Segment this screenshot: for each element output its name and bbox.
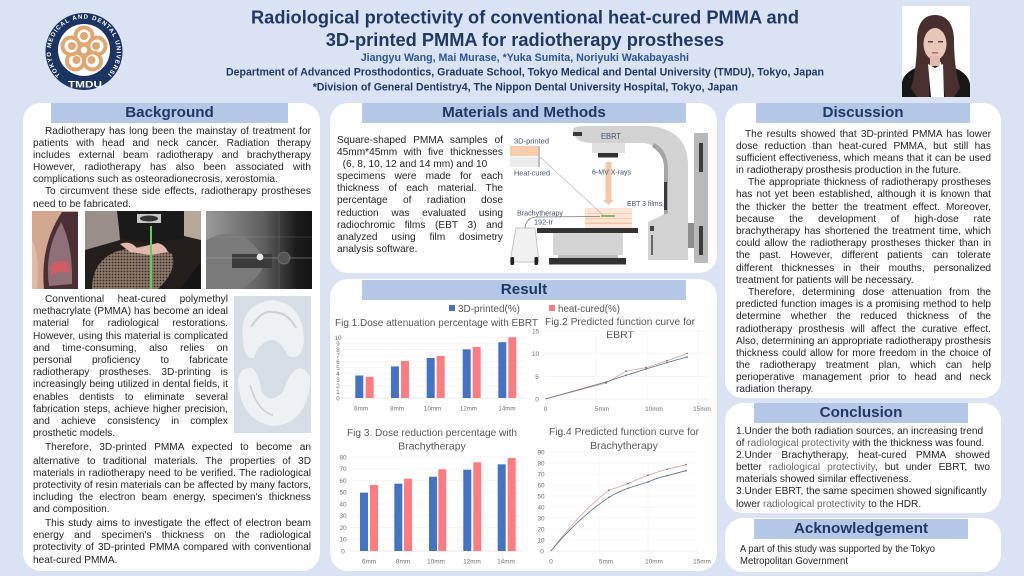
heading: acknowledgement: [754, 519, 968, 539]
chart: Fig 2 predicted function curve for EBRT: 5: [535, 374, 539, 381]
diagram labels: 3D-printed: [514, 138, 549, 146]
chart: Fig 4 predicted function curve for brachytherapy: 15mm: [693, 558, 711, 566]
panel: acknowledgement: [725, 518, 1001, 572]
text block: discussion: predicted function images is a promising method to help: [736, 299, 991, 310]
text block: acknowledgement: [740, 544, 935, 567]
text block: conclusion: of radiological protectivity with the thickness was found.: [736, 438, 984, 449]
chart: Fig 4 predicted function curve for brachytherapy: 60: [537, 482, 545, 490]
chart: Fig 3 dose reduction with brachytherapy: 14mm: [497, 558, 515, 566]
chart: Fig 2 predicted function curve for EBRT: 10mm: [645, 406, 663, 413]
chart: Fig 1 dose attenuation with EBRT: Fig 1.Dose attenuation percentage with EBRT: [335, 317, 539, 329]
text block: conventional PMMA: and achieve consistency in complex: [33, 416, 228, 427]
text block: methods: 45mm*45mm with five thicknesses: [337, 147, 503, 158]
affiliations: Department of Advanced Prosthodontics, Graduate School, Tokyo Medical and Dental University (TMDU), Tokyo, Japan: [226, 67, 824, 79]
diagram labels: 192-Ir: [534, 220, 554, 226]
text block: background intro: However, radiotherapy has also been associated with: [33, 162, 311, 173]
chart: Fig 2 predicted function curve for EBRT: 10: [532, 351, 539, 358]
text block: background intro: complications such as osteoradionecrosis, xerostomia.: [33, 174, 278, 185]
panel: background: [23, 103, 320, 571]
text block: conventional PMMA: personal proficiency to fabricate: [33, 355, 228, 366]
text block: methods: (6, 8, 10, 12 and 14 mm) and 10: [343, 159, 487, 170]
text block: 3D-printed PMMA: [33, 442, 311, 515]
chart: Fig 2 predicted function curve for EBRT: Fig.2 Predicted function curve for: [545, 316, 695, 328]
chart: Fig 3 dose reduction with brachytherapy: 6mm: [362, 558, 376, 566]
chart: Fig 4 predicted function curve for brachytherapy: 0: [540, 548, 544, 556]
chart: Fig 4 predicted function curve for brachytherapy: 40: [537, 504, 545, 512]
photo: patient under linear accelerator: [85, 211, 201, 289]
heading: conclusion: Conclusion: [820, 404, 902, 421]
diagram: radiotherapy setup: [510, 126, 708, 265]
text block: acknowledgement: Metropolitan Government: [740, 556, 848, 567]
heading: background: [51, 103, 288, 123]
heading: result: Result: [501, 281, 547, 298]
logo: TMDU: [46, 13, 122, 90]
text block: 3D-printed PMMA: Therefore, 3D-printed PMMA expected to become an: [45, 442, 311, 453]
chart: Fig 4 predicted function curve for brachytherapy: 50: [537, 494, 545, 500]
text block: discussion: the thicker the better the treatment effect. Moreover,: [736, 202, 991, 213]
X-ray beam arrow: [603, 162, 614, 205]
chart: Fig 1 dose attenuation with EBRT: 6: [336, 359, 340, 366]
chart: Fig 3 dose reduction with brachytherapy: 40: [339, 502, 347, 508]
text block: discussion: has not yet been established, although it is known that: [736, 189, 991, 200]
text block: study aim: protectivity of 3D-printed PMMA compared with conventional: [33, 542, 311, 553]
heading: background: Background: [125, 104, 214, 121]
chart: Fig 2 predicted function curve for EBRT: 15: [532, 328, 539, 336]
heading: result: [362, 280, 686, 300]
text block: conventional PMMA: and time-consuming, also relies on: [33, 343, 228, 354]
chart: Fig 3 dose reduction with brachytherapy: 70: [339, 466, 347, 473]
chart: Fig 1 dose attenuation with EBRT: 8mm: [390, 406, 404, 412]
chart: Fig 3 dose reduction with brachytherapy: 80: [339, 454, 347, 462]
text block: study aim: This study aims to investigate the effect of electron beam: [45, 518, 311, 529]
text block: discussion: [736, 128, 991, 395]
affiliations: [226, 67, 824, 94]
text block: background intro: To circumvent these side effects, radiotherapy prostheses: [45, 186, 311, 197]
text block: discussion: sufficient effectiveness, which means that it can be used: [736, 153, 991, 164]
text block: conventional PMMA: fabrication steps, achieve higher precision,: [33, 404, 228, 415]
diagram labels: EBRT: [601, 132, 621, 141]
chart: Fig 1 dose attenuation with EBRT: 2: [336, 383, 340, 390]
diagram labels: 6-MV X-rays: [592, 170, 631, 176]
afterloader: [510, 216, 600, 265]
text block: conventional PMMA: radiotherapy prostheses. 3D-printing is: [33, 367, 228, 378]
photo: oral lesion: [32, 211, 78, 289]
text block: background intro: patients with head and neck cancer. Radiation therapy: [33, 138, 311, 149]
text block: 3D-printed PMMA: alternative to traditional materials. The properties of 3D: [33, 456, 311, 467]
diagram labels: Brachytherapy: [517, 210, 564, 218]
chart: Fig 3 dose reduction with brachytherapy: 12mm: [463, 558, 481, 566]
heading: materials and methods: Materials and Methods: [442, 104, 606, 121]
diagram labels: EBT 3 films: [627, 201, 662, 208]
text block: study aim: heat-cured PMMA.: [33, 555, 117, 566]
legend: [449, 303, 620, 315]
heading: discussion: [756, 103, 970, 123]
chart: Fig 1 dose attenuation with EBRT: 6mm: [354, 406, 368, 412]
couch: [537, 228, 638, 264]
chart: Fig 3 dose reduction with brachytherapy: 50: [339, 490, 347, 496]
text block: methods: radiochromic films (EBT 3) and: [337, 220, 503, 231]
text block: conventional PMMA: Conventional heat-cured polymethyl: [45, 294, 228, 305]
text block: discussion: brachytherapy has shortened the treatment time, which: [736, 226, 991, 237]
text block: methods: reduction was evaluated using: [337, 208, 503, 219]
text block: background intro: includes external beam radiotherapy and brachytherapy: [33, 150, 311, 161]
text block: methods: specimens were made for each: [337, 171, 503, 182]
text block: discussion: perioperative management prior to head and neck: [736, 372, 991, 383]
text block: background intro: [33, 126, 311, 210]
text block: conventional PMMA: [33, 294, 228, 439]
text block: conventional PMMA: However, using this material is complicated: [33, 331, 228, 342]
title: Radiological protectivity of conventional heat-cured PMMA and: [251, 7, 799, 27]
gantry: [573, 126, 708, 263]
chart: Fig 3 dose reduction with brachytherapy: 10: [339, 536, 347, 544]
chart: Fig 4 predicted function curve for brachytherapy: 80: [537, 460, 545, 468]
text block: methods: thickness of each material. The: [337, 183, 503, 194]
text block: background intro: need to be fabricated.: [33, 199, 131, 210]
chart: Fig 4 predicted function curve for brachytherapy: Fig.4 Predicted function curve for: [549, 426, 699, 438]
panel: conclusion: [725, 403, 1001, 513]
chart: Fig 4 predicted function curve for brachytherapy: 90: [537, 450, 545, 456]
text block: conclusion: better radiological protectivity, but under EBRT, two: [736, 462, 990, 473]
chart: Fig 3 dose reduction with brachytherapy: 8mm: [396, 558, 410, 566]
chart: Fig 2 predicted function curve for EBRT: 5mm: [595, 406, 609, 413]
text block: study aim: [33, 518, 311, 566]
text block: discussion: Therefore, determining dose attenuation from the: [748, 287, 991, 298]
chart: Fig 1 dose attenuation with EBRT: 12mm: [460, 406, 477, 412]
text block: discussion: dose reduction than heat-cured PMMA, but still has: [736, 141, 991, 152]
text block: conclusion: 1.Under the both radiation sources, an increasing trend: [736, 426, 983, 436]
chart: Fig 4 predicted function curve for brachytherapy: 30: [537, 516, 545, 522]
chart: Fig 3 dose reduction with brachytherapy: Fig 3. Dose reduction percentage with: [347, 427, 517, 439]
chart: Fig 3 dose reduction with brachytherapy: Brachytherapy: [398, 440, 467, 452]
chart: Fig 4 predicted function curve for brachytherapy: 20: [537, 526, 545, 534]
heading: discussion: Discussion: [822, 104, 904, 121]
text block: methods: Square-shaped PMMA samples of: [337, 134, 503, 146]
text block: discussion: The appropriate thickness of radiotherapy prostheses: [748, 177, 991, 188]
title: 3D-printed PMMA for radiotherapy prostheses: [326, 30, 724, 50]
panel: result: [330, 279, 717, 571]
chart: Fig 4 predicted function curve for brachytherapy: 10mm: [645, 558, 663, 566]
chart: Fig 1 dose attenuation with EBRT: [335, 317, 539, 412]
text block: conventional PMMA: methacrylate (PMMA) has become an ideal: [33, 306, 228, 317]
text block: discussion: Also, determining an appropriate radiotherapy prosthesis: [736, 336, 991, 347]
logo: TMDU: TMDU: [68, 80, 102, 90]
photo: x-ray: [206, 211, 312, 289]
chart: Fig 1 dose attenuation with EBRT: 3: [336, 377, 340, 384]
text block: discussion: radiation therapy.: [736, 384, 813, 395]
text block: discussion: because the development of high-dose rate: [736, 214, 991, 225]
text block: conventional PMMA: prosthetic models.: [33, 428, 115, 439]
chart: Fig 4 predicted function curve for brachytherapy: Brachytherapy: [590, 440, 659, 452]
chart: Fig 3 dose reduction with brachytherapy: 60: [339, 478, 347, 485]
text block: discussion: The results showed that 3D-printed PMMA has lower: [745, 128, 991, 140]
text block: discussion: different thicknesses in their mouths, personalized: [736, 263, 991, 274]
heading: conclusion: [754, 403, 968, 423]
chart: Fig 1 dose attenuation with EBRT: 10mm: [424, 406, 441, 412]
chart: Fig 2 predicted function curve for EBRT: EBRT: [606, 329, 634, 341]
affiliations: *Division of General Dentistry4, The Nippon Dental University Hospital, Tokyo, Japan: [313, 82, 738, 94]
text block: conventional PMMA: material for radiological restorations.: [33, 318, 228, 329]
chart: Fig 1 dose attenuation with EBRT: 10: [335, 335, 342, 342]
text block: discussion: treatment for patients will be necessary.: [736, 275, 914, 286]
chart: Fig 2 predicted function curve for EBRT: 0: [544, 406, 548, 413]
chart: Fig 1 dose attenuation with EBRT: 7: [336, 353, 340, 360]
chart: Fig 1 dose attenuation with EBRT: 8: [336, 347, 340, 354]
title: [251, 7, 799, 50]
text block: methods: analysis software.: [337, 244, 417, 255]
text block: conclusion: 3.Under EBRT, the same specimen showed significantly: [736, 486, 987, 497]
photo: PMMA prostheses: [234, 296, 311, 433]
chart: Fig 3 dose reduction with brachytherapy: 10mm: [427, 558, 445, 566]
chart: Fig 4 predicted function curve for brachytherapy: 0: [549, 558, 553, 566]
text block: methods: percentage of radiation dose: [337, 195, 503, 206]
text block: discussion: could allow the radiotherapy prostheses thicker than in: [736, 238, 991, 249]
photo: portrait: [902, 6, 970, 97]
chart: Fig 1 dose attenuation with EBRT: 14mm: [498, 406, 516, 412]
chart: Fig 1 dose attenuation with EBRT: 4: [336, 371, 340, 378]
text block: 3D-printed PMMA: materials in radiotherapy need to be verified. The radiological: [33, 468, 311, 479]
diagram labels: Heat-cured: [514, 170, 550, 178]
chart: Fig 4 predicted function curve for brachytherapy: [537, 426, 711, 566]
heading: acknowledgement: Acknowledgement: [794, 520, 928, 537]
text block: conclusion: materials showed similar effectiveness.: [736, 474, 911, 485]
phantom stack and film: [585, 208, 632, 228]
text block: discussion: the radiotherapy treatment plan, which can help: [736, 360, 991, 371]
text block: 3D-printed PMMA: and composition.: [33, 504, 110, 515]
text block: study aim: energy and specimen's thickness on the radiological: [33, 530, 311, 541]
chart: Fig 4 predicted function curve for brachytherapy: 10: [537, 538, 545, 544]
legend: heat-cured(%): [558, 303, 620, 315]
text block: conventional PMMA: enables dentists to eliminate several: [33, 392, 228, 402]
text block: acknowledgement: A part of this study was supported by the Tokyo: [740, 544, 935, 555]
text block: methods: analyzed using film dosimetry: [337, 232, 503, 243]
text block: conclusion: lower radiological protectivity to the HDR.: [736, 499, 921, 510]
chart: Fig 3 dose reduction with brachytherapy: 20: [339, 525, 347, 532]
diagram labels: [514, 132, 662, 226]
text block: discussion: the past. However, different patients can tolerate: [736, 250, 991, 261]
text block: 3D-printed PMMA: protectivity of resin materials can be affected by many factors,: [33, 480, 311, 491]
chart: Fig 4 predicted function curve for brachytherapy: 5mm: [599, 558, 613, 566]
chart: Fig 1 dose attenuation with EBRT: 5: [336, 365, 340, 372]
text block: discussion: determine whether the reduced thickness of the: [736, 311, 991, 322]
text block: discussion: in radiotherapy prosthesis production in the future.: [736, 165, 961, 176]
chart: Fig 1 dose attenuation with EBRT: 0: [336, 396, 340, 402]
text block: background intro: Radiotherapy has long been the mainstay of treatment for: [45, 126, 311, 136]
authors: Jiangyu Wang, Mai Murase, *Yuka Sumita, Noriyuki Wakabayashi: [361, 52, 689, 64]
panel: materials and methods: [330, 103, 717, 273]
text block: conclusion: 2.Under Brachytherapy, heat-cured PMMA showed: [736, 450, 990, 461]
legend: 3D-printed(%): [458, 303, 520, 315]
chart: Fig 2 predicted function curve for EBRT: [532, 316, 711, 413]
chart: Fig 3 dose reduction with brachytherapy: 0: [341, 548, 345, 556]
chart: Fig 4 predicted function curve for brachytherapy: 70: [537, 472, 545, 478]
panel: discussion: [725, 103, 1001, 398]
text block: conclusion: [736, 426, 990, 510]
text block: discussion: thickness could allow for more freedom in the choice of: [736, 348, 991, 359]
text block: discussion: radiotherapy prosthesis will affect the curative effect.: [736, 324, 991, 334]
chart: Fig 3 dose reduction with brachytherapy: [339, 427, 522, 566]
chart: Fig 3 dose reduction with brachytherapy: 30: [339, 513, 347, 520]
chart: Fig 1 dose attenuation with EBRT: 1: [336, 389, 340, 396]
text block: methods: [337, 134, 503, 255]
text block: conventional PMMA: increasingly being utilized in dental fields, it: [33, 379, 228, 390]
text block: 3D-printed PMMA: including the electron beam energy, specimen's thickness: [33, 492, 311, 503]
material samples: [510, 146, 603, 215]
chart: Fig 1 dose attenuation with EBRT: 9: [336, 341, 340, 348]
heading: materials and methods: [362, 103, 686, 123]
chart: Fig 2 predicted function curve for EBRT: 15mm: [693, 406, 711, 413]
chart: Fig 2 predicted function curve for EBRT: 0: [535, 396, 539, 404]
